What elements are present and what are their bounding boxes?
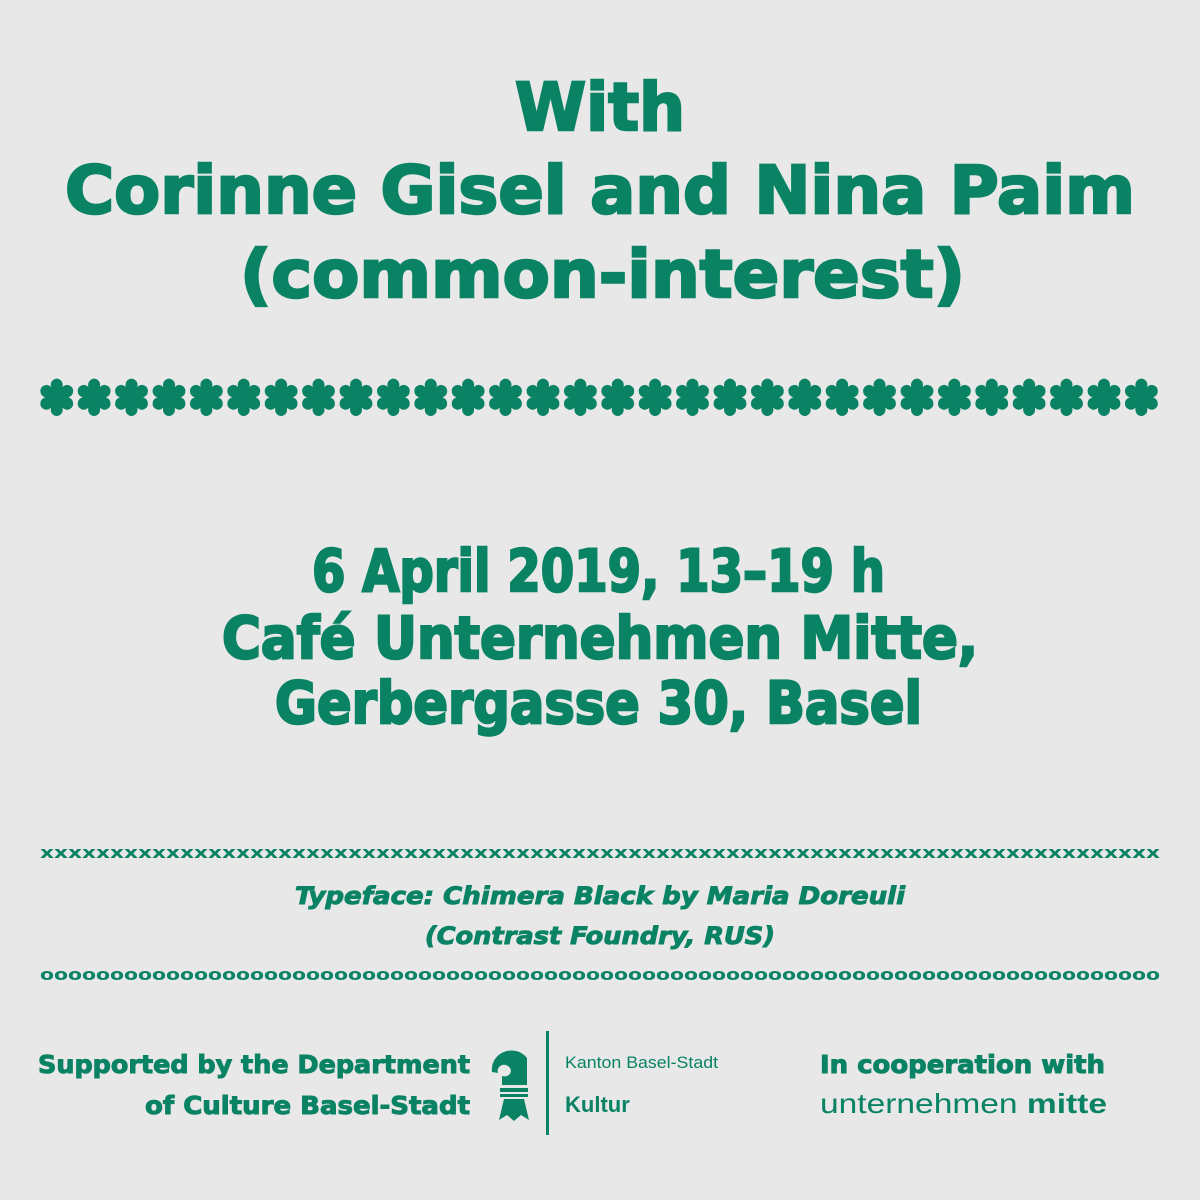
asterisk divider: ✽✽✽✽✽✽✽✽✽✽✽✽✽✽✽✽✽✽✽✽✽✽✽✽✽✽✽✽✽✽ [38,371,1160,425]
logo text: Kanton Basel-Stadt Kultur: Kanton Basel-Stadt [565,1053,718,1072]
cooperation: unternehmen mitte [820,1088,1107,1119]
o divider: oooooooooooooooooooooooooooooooooooooooooooooooooooooooooooooooooooooooooooooooo [40,965,1160,984]
typeface credit: Typeface: Chimera Black by Maria Doreuli [295,882,906,910]
cooperation: In cooperation with [820,1050,1105,1079]
event details: Café Unternehmen Mitte, [222,604,978,672]
title: With [515,69,685,146]
title: Corinne Gisel and Nina Paim [65,152,1135,229]
title: (common-interest) [240,236,965,313]
support text: Supported by the Department [38,1050,470,1079]
x divider: xxxxxxxxxxxxxxxxxxxxxxxxxxxxxxxxxxxxxxxxxxxxxxxxxxxxxxxxxxxxxxxxxxxxxxxxxxxxxxxx [40,843,1161,862]
typeface credit: (Contrast Foundry, RUS) [425,922,775,950]
icon: Basel staff [492,1051,529,1121]
title [65,69,1135,313]
event details: 6 April 2019, 13–19 h [312,537,885,605]
support text: of Culture Basel-Stadt [145,1091,470,1120]
typeface credit [295,882,906,950]
event details [222,537,978,737]
cooperation [820,1050,1107,1119]
logo divider line [546,1031,549,1135]
logo text: Kanton Basel-Stadt Kultur [565,1053,718,1117]
event details: Gerbergasse 30, Basel [275,669,922,737]
support text [38,1050,470,1120]
logo text: Kanton Basel-Stadt Kultur: Kultur [565,1092,630,1117]
